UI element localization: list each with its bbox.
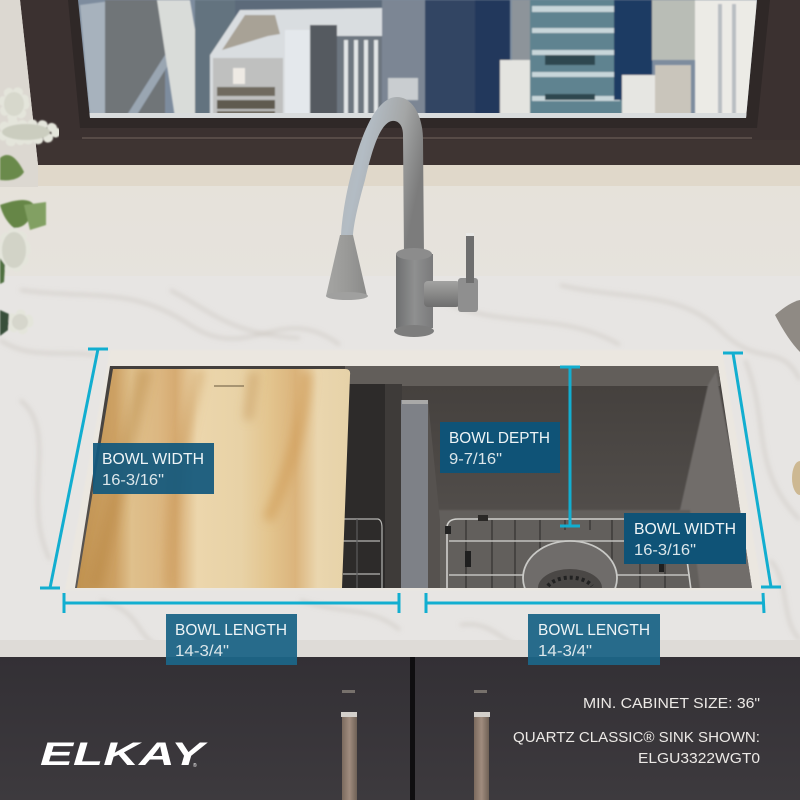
plant: lilac and leaves	[0, 91, 56, 336]
callout: right bowl length: 14-3/4"	[538, 643, 592, 660]
callout: bowl depth: 9-7/16"	[449, 451, 502, 468]
callout: left bowl length: 14-3/4"	[175, 643, 229, 660]
sink rim	[65, 350, 762, 590]
logo: Elkay: ®	[193, 762, 197, 769]
left door handle	[341, 690, 357, 800]
callout: bowl depth: BOWL DEPTH	[449, 430, 550, 447]
dimension line: left bowl length	[63, 593, 399, 613]
window view: city skyline	[78, 0, 758, 118]
right rack and strainer	[445, 515, 692, 588]
right wall	[680, 374, 752, 588]
callout: right bowl width: BOWL WIDTH	[634, 521, 736, 538]
dimension line: right bowl length	[426, 593, 764, 613]
callout: left bowl length: BOWL LENGTH	[175, 622, 287, 639]
callout: bowl depth	[440, 422, 560, 473]
text: sink model: QUARTZ CLASSIC® SINK SHOWN:	[513, 729, 760, 746]
callout: right bowl length	[528, 614, 660, 665]
logo: Elkay: ELKAY	[40, 736, 208, 772]
text: sink model: ELGU3322WGT0	[638, 750, 760, 767]
text: sink model	[513, 729, 760, 767]
cabinet doors	[0, 657, 800, 800]
callout: right bowl width: 16-3/16"	[634, 542, 696, 559]
dimension line: bowl depth	[560, 367, 580, 526]
left bowl interior	[342, 384, 385, 588]
logo: Elkay	[40, 736, 208, 772]
teapot at right	[775, 300, 800, 352]
callout: left bowl length	[166, 614, 297, 665]
callout: right bowl width	[624, 513, 746, 564]
callout: right bowl length: BOWL LENGTH	[538, 622, 650, 639]
divider	[428, 400, 440, 590]
round tan object at right	[792, 461, 800, 495]
text: minimum cabinet size: MIN. CABINET SIZE: 36"	[583, 695, 760, 712]
dimension line: right bowl width	[723, 353, 781, 587]
callout: left bowl width: BOWL WIDTH	[102, 451, 204, 468]
floor	[430, 510, 700, 590]
cutting board	[77, 369, 350, 588]
callout: left bowl width	[93, 443, 214, 494]
right door handle	[474, 690, 490, 800]
dimension line: left bowl width	[40, 349, 108, 588]
side wall	[0, 0, 38, 187]
ledge	[345, 366, 720, 386]
left rack	[343, 519, 382, 588]
callout: left bowl width: 16-3/16"	[102, 472, 164, 489]
countertop	[0, 276, 800, 658]
sink basin	[75, 366, 752, 588]
window sill	[38, 165, 800, 186]
faucet	[326, 97, 478, 337]
window frame	[20, 0, 800, 165]
wall backdrop	[0, 0, 800, 280]
